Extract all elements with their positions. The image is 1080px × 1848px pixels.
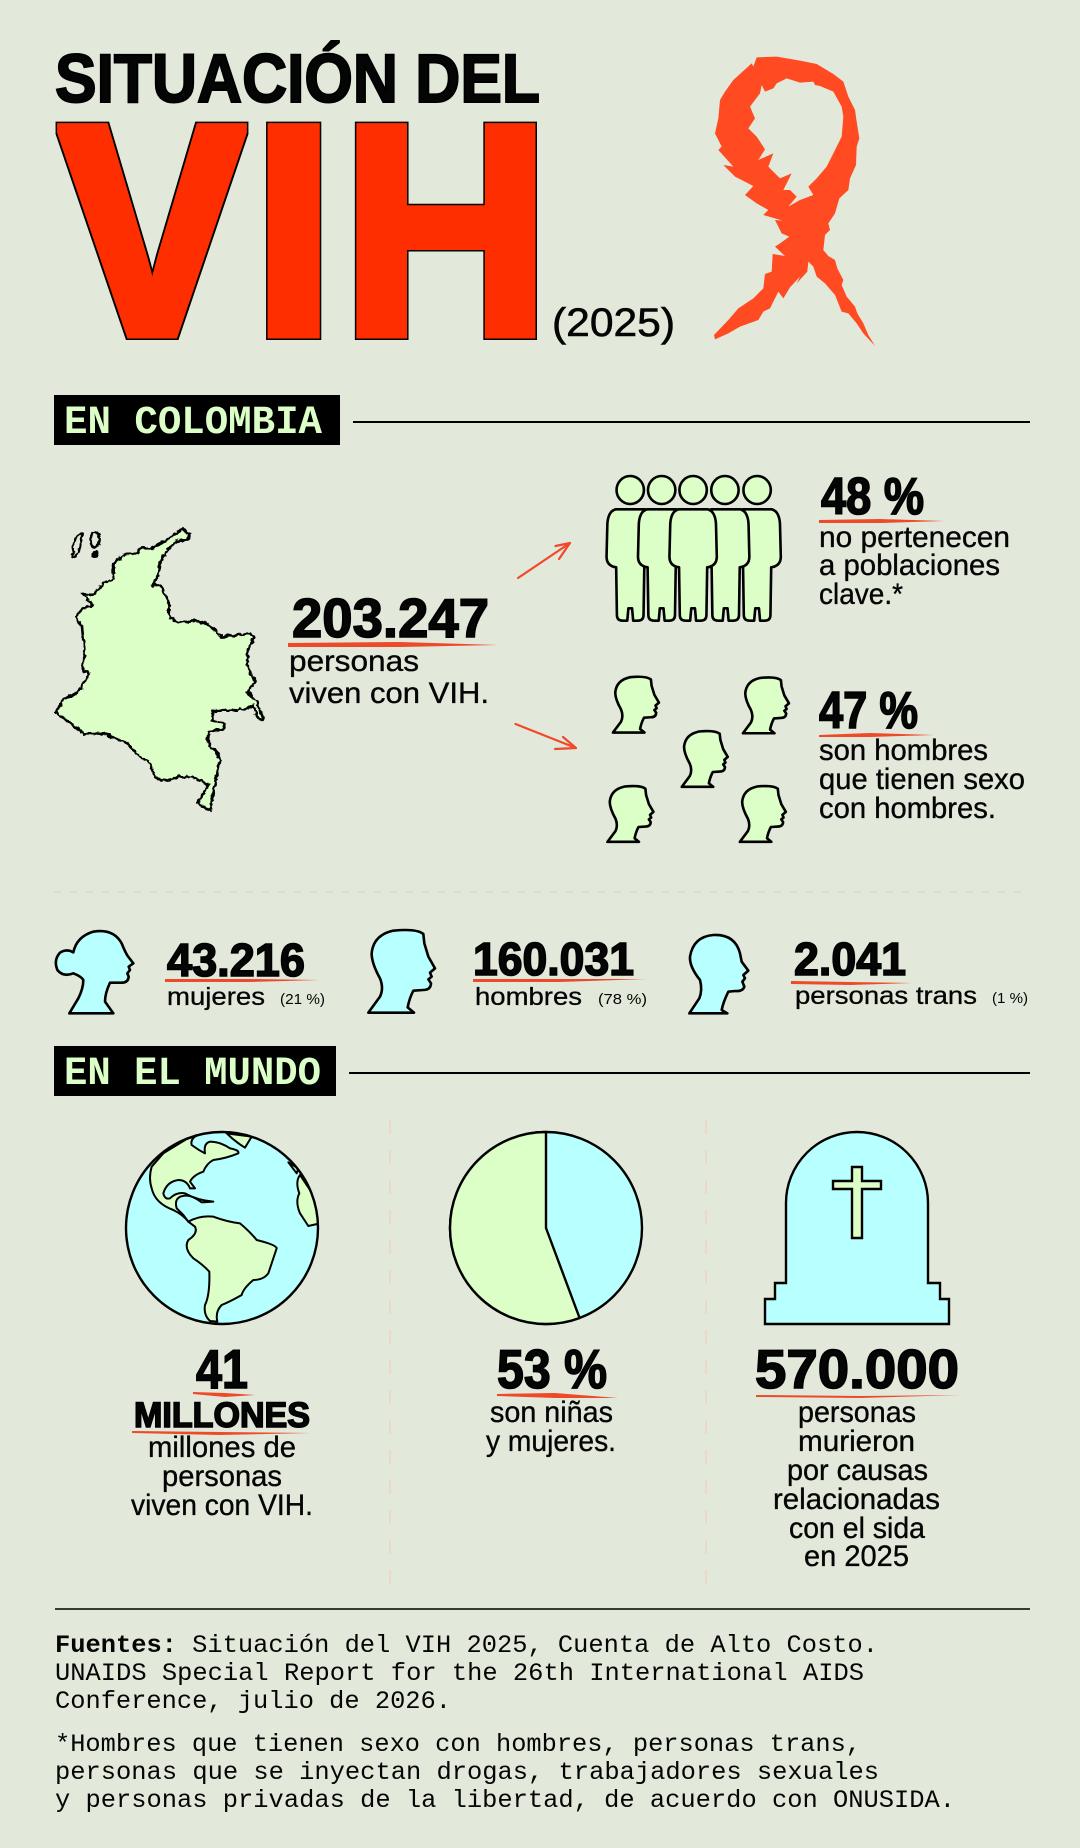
stat: 47 percent: con hombres. [819,792,996,825]
stat: total Colombia: viven con VIH. [289,677,489,710]
title: VIH [60,62,550,398]
stat: 570.000: 570.000 [755,1338,959,1400]
stat: 570.000: personas [798,1396,916,1429]
icon: trans head [689,935,748,1013]
arrow: to group 1 [518,543,570,578]
stat: 53 percent: 53 % [497,1338,607,1400]
footnote: y personas privadas de la libertad, de acuerdo con ONUSIDA. [55,1786,955,1815]
year label: (2025) [552,301,675,345]
stat: personas trans: personas trans [795,982,977,1010]
sources: Fuentes: Situación del VIH 2025, Cuenta de Alto Costo. [55,1631,878,1660]
section heading: en el mundo [54,1046,1030,1097]
stat: total Colombia: personas [289,645,419,678]
title: VIH: I [252,62,335,398]
stat: 41 millones: millones de [148,1431,296,1464]
stat: 47 percent: que tienen sexo [819,763,1025,796]
stat: 48 percent: 48 % [821,468,924,526]
section heading: en colombia [54,395,1030,446]
stat: total Colombia: 203.247 [292,587,489,649]
stat: 41 millones: viven con VIH. [131,1489,313,1522]
stat: 53 percent: son niñas [490,1396,613,1429]
stat: 47 percent: 47 % [819,682,918,740]
icon: five people [607,476,781,621]
stat: 570.000: murieron [798,1425,915,1458]
stat: mujeres [165,934,325,1011]
stat: personas trans [791,933,1028,1010]
stat: mujeres: (21 %) [280,991,325,1008]
footnote: personas que se inyectan drogas, trabajadores sexuales [55,1758,879,1787]
stat: mujeres: mujeres [167,983,265,1011]
stat: 53 percent: y mujeres. [486,1425,616,1458]
title: situación del: SITUACIÓN DEL [55,40,540,117]
stat: personas trans: (1 %) [992,990,1028,1007]
arrow: to group 2 [516,724,576,749]
stat: 570.000: con el sida [789,1512,925,1545]
sources [55,1631,878,1716]
stat: total Colombia [288,587,498,710]
stat: 41 millones: 41 [196,1338,248,1400]
footnote: *Hombres que tienen sexo con hombres, personas trans, [55,1730,861,1759]
stat: personas trans: 2.041 [794,933,906,985]
stat: 41 millones [131,1338,313,1522]
stat: 570.000: relacionadas [773,1483,940,1516]
icon: globe [126,1132,320,1324]
section heading: en colombia: EN COLOMBIA [64,401,322,446]
stat: mujeres: 43.216 [167,934,305,986]
icon: tombstone [765,1132,949,1324]
pie chart: 53 percent [450,1132,642,1324]
stat: 48 percent [819,468,1010,611]
stat: 47 percent [819,682,1025,825]
stat: 53 percent [486,1338,618,1458]
stat: hombres: hombres [475,983,582,1011]
stat: 48 percent: no pertenecen [819,521,1010,554]
title: VIH: H [342,62,550,398]
footnote [55,1730,955,1815]
stat: 41 millones: personas [162,1460,282,1493]
title: VIH: V [60,62,246,398]
map of Colombia [56,529,263,811]
stat: 570.000: por causas [787,1454,928,1487]
section heading: en el mundo: EN EL MUNDO [64,1052,321,1097]
sources: Conference, julio de 2026. [55,1687,451,1716]
sources: UNAIDS Special Report for the 26th International AIDS [55,1659,864,1688]
icon: red ribbon [714,57,875,346]
stat: hombres: 160.031 [473,933,634,985]
stat: hombres [473,933,647,1011]
stat: 48 percent: clave.* [819,578,903,611]
icon: five male heads [607,677,789,842]
stat: 41 millones: MILLONES [134,1396,310,1435]
stat: hombres: (78 %) [598,991,647,1008]
icon: woman head [56,931,133,1013]
stat: 47 percent: son hombres [819,734,988,767]
icon: man head [368,930,435,1013]
stat: 570.000 [755,1338,961,1573]
stat: 570.000: en 2025 [804,1540,909,1573]
stat: 48 percent: a poblaciones [819,549,1000,582]
